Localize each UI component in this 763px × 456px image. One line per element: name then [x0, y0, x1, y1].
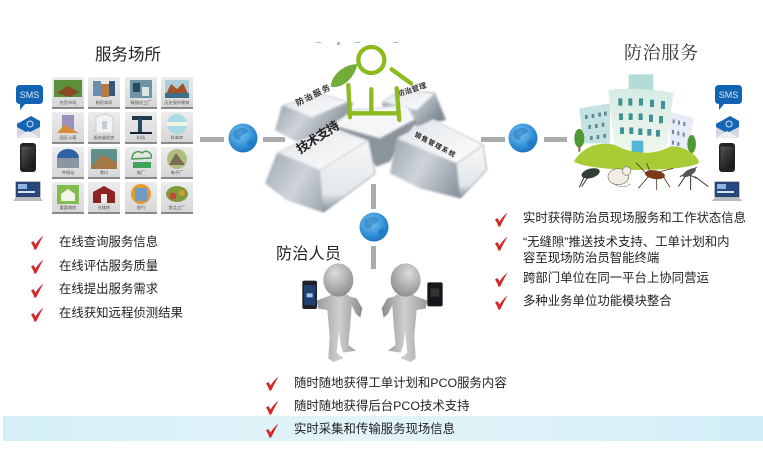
check mark: [495, 296, 508, 310]
text: 实时获得防治员现场服务和工作状态信息: [523, 210, 746, 225]
staff figures with phones: [302, 263, 443, 362]
key: back right: [382, 81, 446, 127]
connector: right to keys: [481, 137, 505, 142]
top faint marks: [316, 42, 398, 45]
connector: left: [200, 137, 224, 142]
key: front right: [390, 119, 487, 198]
tile: water plant: 样本库: [171, 134, 183, 141]
tile: food plant: 食品工厂: [169, 204, 185, 211]
building illustration with pests: [574, 74, 708, 190]
text: 多种业务单位功能模块整合: [523, 293, 672, 308]
check mark: [495, 236, 508, 251]
tile: farm: 农贸市场: [60, 99, 76, 106]
tile: airport: [125, 112, 157, 144]
connector: staff bottom: [371, 246, 376, 269]
tile: electronics plant: 电子厂: [171, 169, 183, 176]
tile: warehouse: 仓储库: [98, 204, 110, 211]
panel: service site tile grid: [52, 77, 193, 214]
tile: hospital ward: [52, 182, 84, 214]
text: 在线评估服务质量: [59, 258, 158, 273]
text: 跨部门单位在同一平台上协同营运: [523, 270, 709, 285]
check mark: [266, 376, 278, 391]
icon: mail: [716, 116, 739, 138]
trees: [574, 129, 696, 156]
check mark: [31, 284, 44, 298]
tile: electronics plant: [161, 147, 193, 179]
tile: restaurant: 园区公寓: [60, 134, 76, 141]
tile: substation: 井格站: [62, 169, 74, 176]
key: front left, technical support: [265, 117, 375, 213]
check mark: [31, 308, 44, 322]
key: front left, technical support: 技术支持: [293, 117, 342, 157]
check mark: [495, 272, 508, 287]
tile: restaurant: [52, 112, 84, 144]
key: back left: 防治服务: [294, 82, 332, 108]
tile: airport: 机场: [137, 134, 145, 141]
building: main tower: [608, 74, 673, 153]
tile: port: [88, 147, 120, 179]
tile: factory: [125, 77, 157, 109]
tile: power plant: [125, 147, 157, 179]
list: service site benefits: [31, 234, 183, 322]
text: 容至现场防治员智能终端: [523, 250, 659, 265]
pest: cockroach: [636, 163, 673, 190]
text: 随时随地获得后台PCO技术支持: [294, 398, 470, 413]
icon: SMS: [16, 85, 43, 110]
list: control service benefits: [495, 210, 746, 310]
check mark: [495, 212, 508, 227]
tile: hospital ward: 重要病房: [60, 204, 76, 211]
text: 在线获知远程侦测结果: [59, 305, 183, 320]
background light blue band: [3, 416, 763, 441]
key: centre: [332, 105, 417, 167]
tile: substation: [52, 147, 84, 179]
tile: heritage: 历史保护建筑: [164, 99, 190, 106]
keyboard keys with logo: [265, 47, 487, 213]
check mark: [266, 424, 278, 438]
pest: fly: [579, 166, 601, 187]
check mark: [31, 260, 44, 274]
left channel icons: [13, 85, 43, 201]
tile: kitchen: [88, 77, 120, 109]
pest: mosquito: [678, 166, 708, 190]
check mark: [31, 236, 44, 250]
tile: factory: 精细化工厂: [131, 99, 151, 106]
pest: mouse: [608, 167, 631, 187]
key: back right: 防治管理: [396, 81, 428, 99]
key: front right: 销售管理系统: [413, 130, 457, 159]
icon: right globe: [508, 124, 538, 152]
text: 随时随地获得工单计划和PCO服务内容: [294, 375, 507, 390]
heading: pest control service: 防治服务: [624, 43, 698, 63]
tile: server room: 服务器机房: [94, 134, 114, 141]
tile: heritage: [161, 77, 193, 109]
text: 实时采集和传输服务现场信息: [294, 421, 455, 436]
key: back left: [275, 82, 353, 142]
tile: farm: [52, 77, 84, 109]
check mark: [266, 400, 278, 415]
tile: water plant: [161, 112, 193, 144]
icon: smartphone: [719, 143, 735, 172]
building: right wing: [670, 112, 694, 152]
icon: left globe: [228, 124, 258, 152]
figure: right person: [382, 263, 443, 362]
list: staff benefits: [266, 375, 507, 438]
tile: port: 港口: [100, 169, 108, 176]
tile: food plant: [161, 182, 193, 214]
figure: left person: [302, 263, 362, 362]
text: “无缝隙”推送技术支持、工单计划和内: [523, 234, 730, 249]
tile: server room: [88, 112, 120, 144]
connector: right to building: [544, 137, 567, 142]
tile: bank: 银行: [137, 204, 145, 211]
icon: SMS: [715, 85, 742, 110]
connector: keys to staff top: [371, 184, 376, 209]
building: left wing: [579, 103, 610, 143]
icon: laptop: [712, 182, 742, 201]
heading: pest control staff: 防治人员: [276, 245, 341, 263]
tile: kitchen: 制药车间: [96, 99, 112, 106]
tile: warehouse: [88, 182, 120, 214]
logo: green person with leaf: [331, 47, 411, 120]
icon: centre globe: [360, 212, 388, 242]
tile: bank: [125, 182, 157, 214]
lawn: [574, 144, 699, 170]
heading: service sites: 服务场所: [95, 45, 161, 64]
text: 在线查询服务信息: [59, 234, 158, 249]
icon: smartphone: [20, 143, 36, 172]
icon: laptop: [13, 182, 43, 201]
icon: mail: [17, 116, 40, 138]
tile: power plant: 电厂: [137, 169, 145, 176]
text: 在线提出服务需求: [59, 281, 158, 296]
connector: left to keys: [263, 137, 285, 142]
right channel icons: [712, 85, 742, 201]
